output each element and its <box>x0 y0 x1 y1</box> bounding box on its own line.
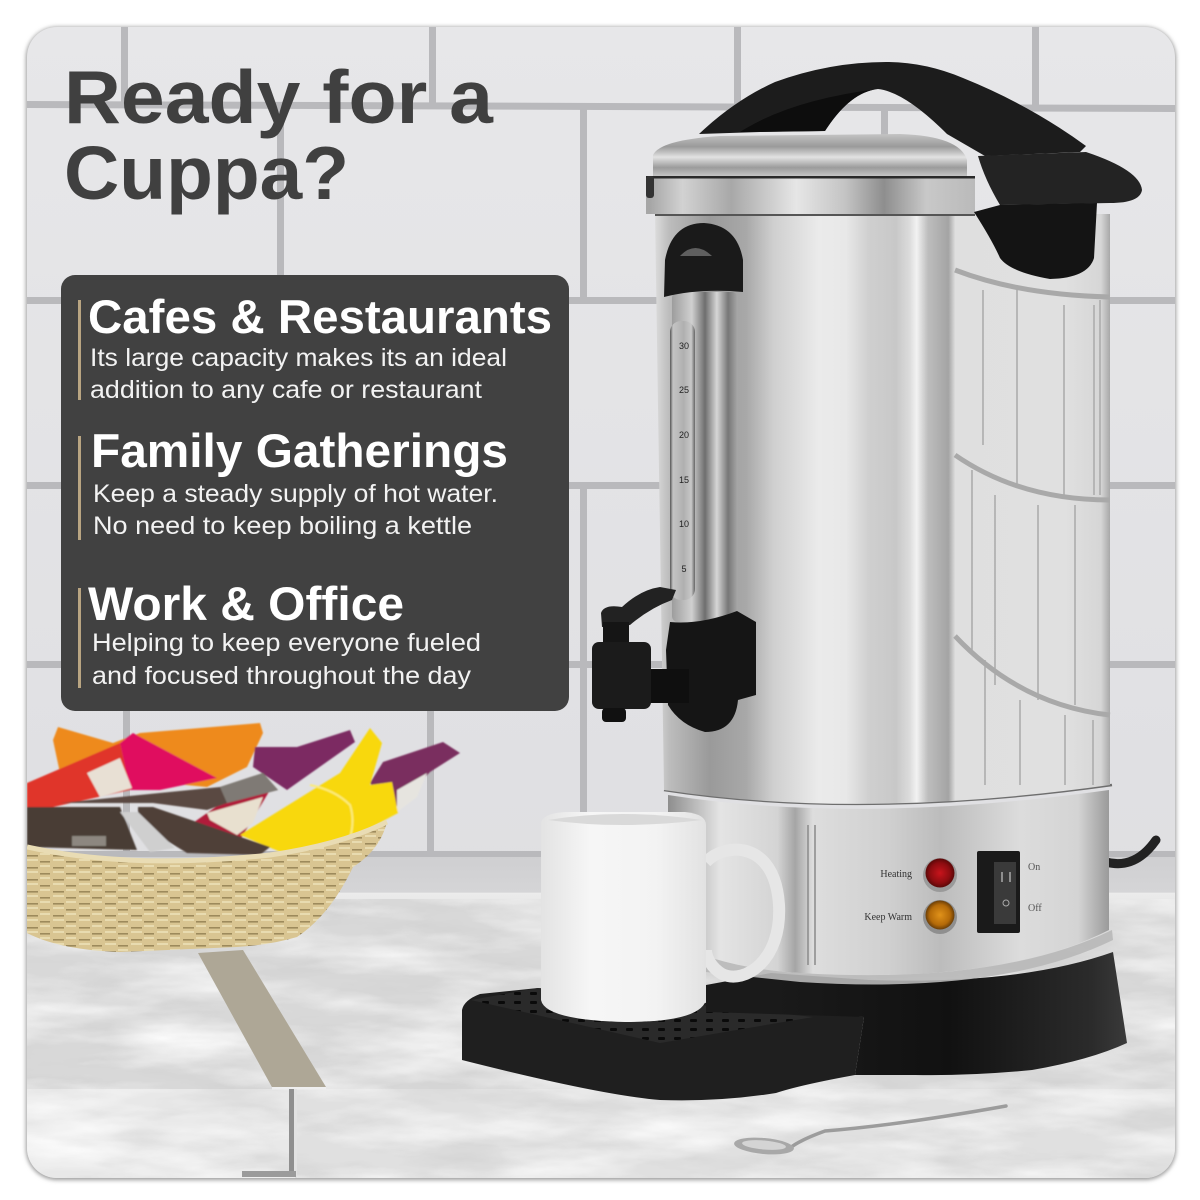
section: work and office: Work & Office <box>88 577 404 630</box>
snack packets <box>27 723 460 855</box>
section: cafes and restaurants: Cafes & Restaurants <box>88 290 552 343</box>
title: Ready for a <box>64 55 494 139</box>
section: family gatherings <box>78 424 508 540</box>
control panel <box>864 851 1042 934</box>
control labels: Keep Warm <box>864 912 912 923</box>
marble counter <box>27 899 1177 1184</box>
tap <box>592 587 756 732</box>
wicker basket <box>27 822 387 952</box>
gauge numbers: 25 <box>679 385 689 395</box>
keep warm light <box>923 900 957 934</box>
gauge numbers <box>679 341 689 574</box>
urn lower section <box>664 785 1113 984</box>
urn lid <box>646 134 975 216</box>
gauge numbers: 15 <box>679 475 689 485</box>
section: cafes and restaurants: Its large capacity makes its an ideal <box>90 344 507 372</box>
section: family gatherings: Keep a steady supply of hot water. <box>93 480 498 508</box>
reflected grout lines <box>955 270 1110 785</box>
heating light <box>923 858 957 892</box>
metal counter trim <box>198 950 326 1177</box>
sight glass <box>670 321 695 600</box>
section: family gatherings: No need to keep boiling a kettle <box>93 512 472 540</box>
water level gauge <box>664 223 743 622</box>
control labels: On <box>1028 862 1040 873</box>
backsplash strip <box>123 857 1175 899</box>
power cord <box>1106 840 1156 864</box>
gauge cap <box>664 223 743 297</box>
control labels: Heating <box>880 869 912 880</box>
spoon <box>733 1106 1006 1157</box>
urn base <box>706 952 1127 1075</box>
drip tray <box>462 988 864 1100</box>
power switch <box>977 851 1020 933</box>
section: cafes and restaurants: addition to any cafe or restaurant <box>90 376 482 404</box>
tiled wall <box>27 27 1175 897</box>
section: cafes and restaurants <box>78 290 552 404</box>
section: work and office <box>78 577 481 690</box>
section: family gatherings: Family Gatherings <box>91 424 508 477</box>
title <box>64 55 494 215</box>
mug <box>541 812 779 1022</box>
section: work and office: Helping to keep everyone fueled <box>92 629 481 657</box>
urn handle <box>699 62 1142 279</box>
urn body <box>655 214 1110 804</box>
gauge numbers: 30 <box>679 341 689 351</box>
section: work and office: and focused throughout the day <box>92 662 472 690</box>
panel: use cases <box>61 275 569 711</box>
gauge numbers: 10 <box>679 519 689 529</box>
gauge numbers: 20 <box>679 430 689 440</box>
control labels <box>864 862 1042 923</box>
title: Cuppa? <box>64 131 349 215</box>
gauge numbers: 5 <box>681 564 687 574</box>
control labels: Off <box>1028 903 1042 914</box>
